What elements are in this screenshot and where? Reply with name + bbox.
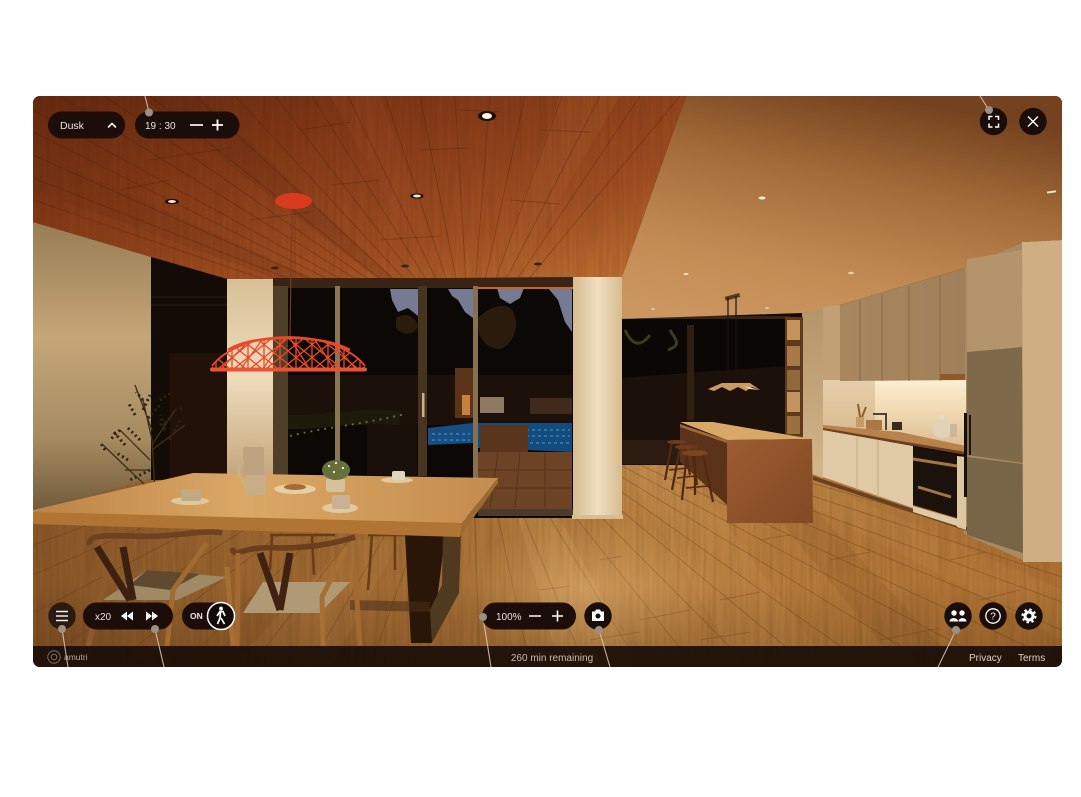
- deck: [478, 452, 572, 509]
- floor: [33, 465, 1062, 667]
- left cup: [171, 497, 209, 505]
- kitchen backing: [964, 242, 1023, 560]
- cabinet above fridge: [967, 250, 1022, 352]
- table items: [171, 447, 413, 513]
- counter: [823, 426, 966, 455]
- stools: [665, 440, 713, 502]
- pendant lamp: [210, 193, 367, 372]
- remaining time: 260 min remaining: [511, 653, 593, 664]
- left wall: [33, 222, 151, 512]
- control: speed: [83, 602, 173, 630]
- base cabinets: [823, 430, 913, 508]
- flower vase: [326, 478, 345, 492]
- dining chair right: [232, 537, 360, 647]
- dining chair left: [88, 532, 233, 647]
- logo: amutri: [64, 652, 88, 662]
- control: speed: x20: [95, 612, 112, 623]
- button: help: ?: [990, 612, 996, 622]
- garden fence: [288, 375, 572, 425]
- back right window: [620, 316, 790, 465]
- backsplash: [823, 380, 966, 452]
- column 2: [572, 277, 623, 519]
- tree highlights: [396, 306, 516, 349]
- link: privacy: Privacy: [969, 653, 1002, 664]
- stacked cups: [245, 475, 266, 495]
- plant: [100, 385, 185, 490]
- right pendant lamp: [708, 293, 760, 391]
- callout dots: [58, 106, 993, 634]
- control: zoom: 100%: [496, 612, 522, 623]
- control: zoom: [482, 602, 576, 630]
- control: clock: 19 : 30: [145, 121, 176, 132]
- control: walk mode: ON: [190, 611, 203, 621]
- control: walk mode: [182, 602, 234, 630]
- button: people: [944, 602, 972, 630]
- fridge: [967, 347, 1023, 463]
- kitchen island: [680, 422, 813, 523]
- outdoor seats: [367, 425, 417, 475]
- callout lines: [62, 96, 989, 667]
- kitchen items: [856, 404, 957, 438]
- pitcher: [243, 447, 264, 477]
- wood ceiling: [33, 96, 686, 279]
- kitchen: [802, 240, 1062, 562]
- kitchen wall: [802, 308, 823, 478]
- right ceiling: [620, 96, 1062, 319]
- oven: [913, 447, 957, 518]
- column 1: [227, 279, 273, 477]
- button: close: [1019, 108, 1047, 135]
- button: camera: [584, 602, 612, 630]
- ceiling lights: [165, 111, 1056, 310]
- logo: [48, 651, 88, 663]
- glazed doors and garden: [273, 278, 573, 518]
- control: clock: [135, 112, 240, 138]
- upper cabinets: [840, 268, 965, 381]
- control: time of day selector: [48, 112, 125, 138]
- door frames: [273, 286, 288, 478]
- garden pavilion: [455, 368, 473, 418]
- far cup: [381, 477, 413, 483]
- centre cup: [322, 503, 358, 513]
- left dark window wall: [151, 257, 227, 480]
- bottom bar: [33, 646, 1062, 667]
- button: fullscreen: [980, 108, 1007, 135]
- sky: [390, 288, 572, 332]
- button: help: [979, 602, 1007, 630]
- table legs: [350, 535, 461, 643]
- far chairs: [269, 534, 405, 590]
- tall side panel: [1022, 240, 1062, 562]
- button: menu: [48, 602, 76, 630]
- pool: [428, 423, 473, 445]
- control: time of day selector: Dusk: [60, 120, 85, 132]
- dining table: [33, 473, 498, 537]
- link: terms: Terms: [1018, 653, 1045, 664]
- panel: 3D scene: [33, 96, 1062, 667]
- button: settings: [1015, 602, 1043, 630]
- viewer screenshot: [33, 96, 1062, 667]
- shelf: [785, 317, 803, 437]
- plate of snacks: [274, 484, 316, 494]
